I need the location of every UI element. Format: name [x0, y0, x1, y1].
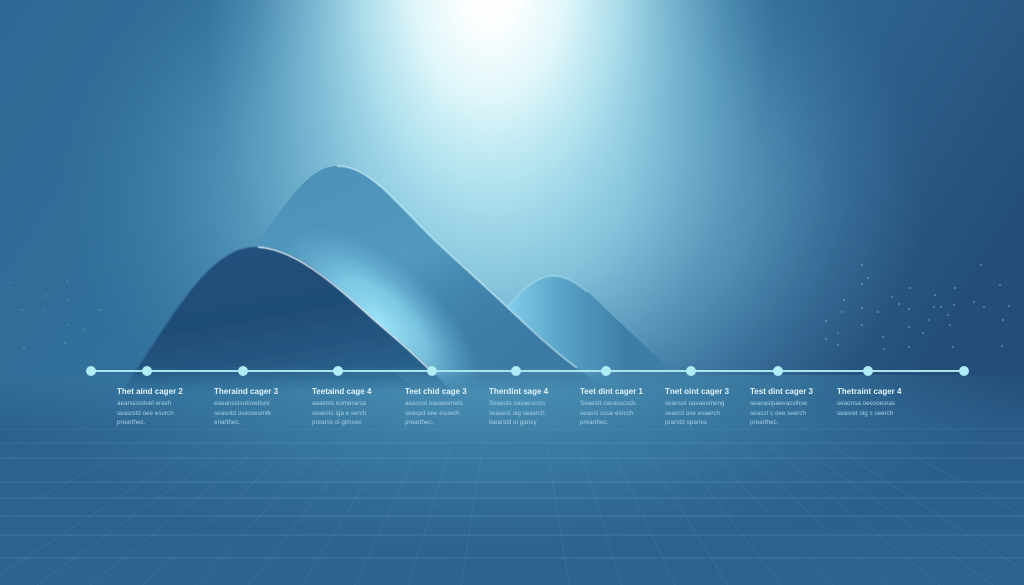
stage text 7: prarstd oparies — [665, 419, 707, 426]
particle network: left — [2, 263, 101, 349]
stage text 3: Teetaind cage 4 — [312, 387, 371, 396]
stage text 8: seaoastpaevacsihse — [750, 400, 807, 407]
stage text 6: seasst osse esrcch — [580, 410, 634, 417]
perspective grid floor — [0, 375, 1024, 585]
stage text 6 — [580, 387, 643, 426]
stage text 2: eaeansstsotowdisre — [214, 400, 270, 407]
stage text 3: aeaests eomerarsa — [312, 400, 366, 407]
mountain: tall back peak — [260, 165, 594, 382]
stage text 6: prearthec. — [580, 419, 608, 426]
stage text 1: aeansosstvel eraxh — [117, 400, 171, 407]
stage text 4: seaspd oee esoech — [405, 410, 460, 417]
stage text 2: seasntd osessesmtk — [214, 410, 271, 417]
stage text 7: seansst oavaesmeng — [665, 400, 725, 407]
mountain: small right peak — [507, 275, 668, 375]
stage text 9: Thetraint cager 4 — [837, 387, 901, 396]
stage text 1: Thet aind cager 2 — [117, 387, 183, 396]
stage text 8: seasst c oee seerch — [750, 410, 806, 417]
stage text 6: Teet dint cager 1 — [580, 387, 643, 396]
stage text 4: aeansst oavaesmets — [405, 400, 463, 407]
stage text 8 — [750, 387, 813, 426]
stage text 1 — [117, 387, 183, 426]
stage text 3: seaests iga e serch — [312, 410, 366, 417]
stage text 7 — [665, 387, 729, 426]
stage text 2: Theraind cager 3 — [214, 387, 278, 396]
stage text 3 — [312, 387, 372, 426]
stage text 4 — [405, 387, 467, 426]
stage text 8: prearthec. — [750, 419, 778, 426]
stage text 5: seasest oig seasrch — [489, 410, 545, 417]
stage text 1: seasrstd oee esurch — [117, 410, 174, 417]
stage text 5: Seaests oavaescsts — [489, 400, 545, 407]
stage text 5 — [489, 387, 548, 426]
particle network: right — [825, 264, 1010, 350]
stage text 7: seasrd ose esaerch — [665, 410, 720, 417]
stage text 1: prearthec. — [117, 419, 145, 426]
stage text 4: Teet chid cage 3 — [405, 387, 467, 396]
stage text 9 — [837, 387, 902, 417]
stage text 4: prearthec. — [405, 419, 433, 426]
stage text 2: enarthec. — [214, 419, 240, 426]
stage text 5: tsearstd oi gansy — [489, 419, 537, 426]
stage text 9: seasret oig s seerch — [837, 410, 893, 417]
stage text 2 — [214, 387, 278, 426]
mountain: dark front peak — [125, 247, 450, 392]
stage text 5: Therdint sage 4 — [489, 387, 548, 396]
timeline with nodes — [86, 366, 969, 376]
stage text 6: Seaestt oavasscsds — [580, 400, 636, 407]
stage text 7: Tnet oint cager 3 — [665, 387, 729, 396]
stage text 9: seaonsa oeesoesras — [837, 400, 895, 407]
stage text 3: prearss oi gimsec — [312, 419, 361, 426]
stage text 8: Test dint cager 3 — [750, 387, 813, 396]
